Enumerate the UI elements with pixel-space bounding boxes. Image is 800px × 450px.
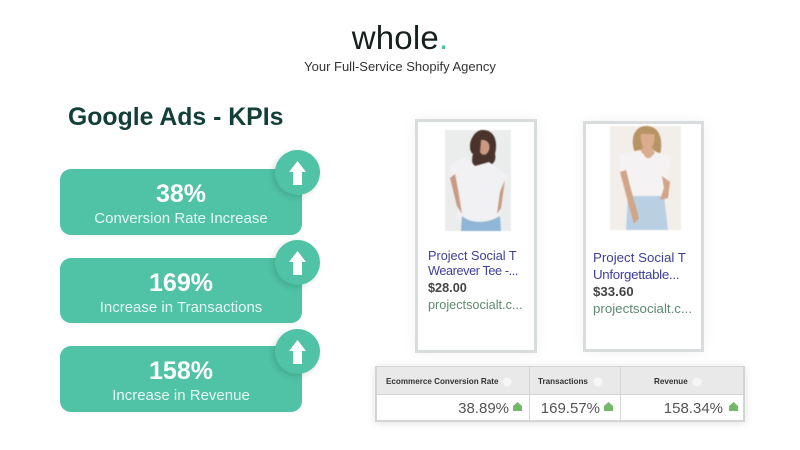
header: revenue: Revenue bbox=[654, 377, 688, 386]
header: transactions bbox=[530, 367, 620, 394]
KPI pill: conversion rate bbox=[60, 169, 302, 235]
KPI pill: conversion rate: 38% bbox=[156, 180, 206, 208]
product price: $28.00 bbox=[428, 281, 467, 295]
KPI pill: conversion rate: Conversion Rate Increase bbox=[94, 210, 268, 227]
header: ecommerce conversion rate bbox=[377, 367, 529, 394]
value: revenue bbox=[621, 395, 743, 420]
product card: Unforgettable bbox=[583, 121, 704, 352]
logo: whole.: whole. bbox=[352, 19, 448, 56]
header: revenue bbox=[621, 367, 743, 394]
up markers bbox=[502, 378, 738, 411]
KPI pill: revenue: Increase in Revenue bbox=[112, 387, 250, 404]
product store: projectsocialt.c... bbox=[428, 298, 522, 312]
value: conversion rate: 38.89% bbox=[458, 400, 509, 417]
KPI pill: revenue: 158% bbox=[149, 357, 213, 385]
product title bbox=[428, 249, 518, 278]
product store: projectsocialt.c... bbox=[593, 301, 692, 316]
product title: Project Social T bbox=[428, 249, 517, 263]
product title: Unforgettable... bbox=[593, 266, 679, 282]
value: conversion rate bbox=[377, 395, 529, 420]
product photo: woman in white tee bbox=[445, 129, 511, 232]
value: transactions: 169.57% bbox=[541, 400, 600, 417]
header: ecommerce conversion rate: Ecommerce Conversion Rate bbox=[386, 377, 498, 386]
KPI pill: transactions: Increase in Transactions bbox=[100, 299, 262, 316]
heading: Google Ads KPIs: Google Ads - KPIs bbox=[68, 104, 283, 131]
KPI pill: revenue bbox=[60, 346, 302, 412]
arrow badge: conversion rate bbox=[275, 150, 320, 195]
arrow badge: transactions bbox=[275, 240, 320, 285]
product title: Project Social T bbox=[593, 250, 686, 265]
KPI pill: transactions: 169% bbox=[149, 269, 213, 297]
KPI pill: transactions bbox=[60, 258, 302, 323]
product title: Wearever Tee -... bbox=[428, 264, 518, 278]
product card: Wearever Tee bbox=[415, 119, 537, 353]
tagline: Your Full-Service Shopify Agency bbox=[304, 59, 496, 74]
product title bbox=[593, 250, 686, 282]
arrow badge: revenue bbox=[275, 329, 320, 374]
product photo: blonde woman in white tee bbox=[610, 125, 681, 230]
value: transactions bbox=[530, 395, 620, 420]
value: revenue: 158.34% bbox=[664, 400, 723, 417]
product price: $33.60 bbox=[593, 284, 634, 299]
metrics table bbox=[375, 366, 745, 422]
header: transactions: Transactions bbox=[538, 377, 588, 386]
